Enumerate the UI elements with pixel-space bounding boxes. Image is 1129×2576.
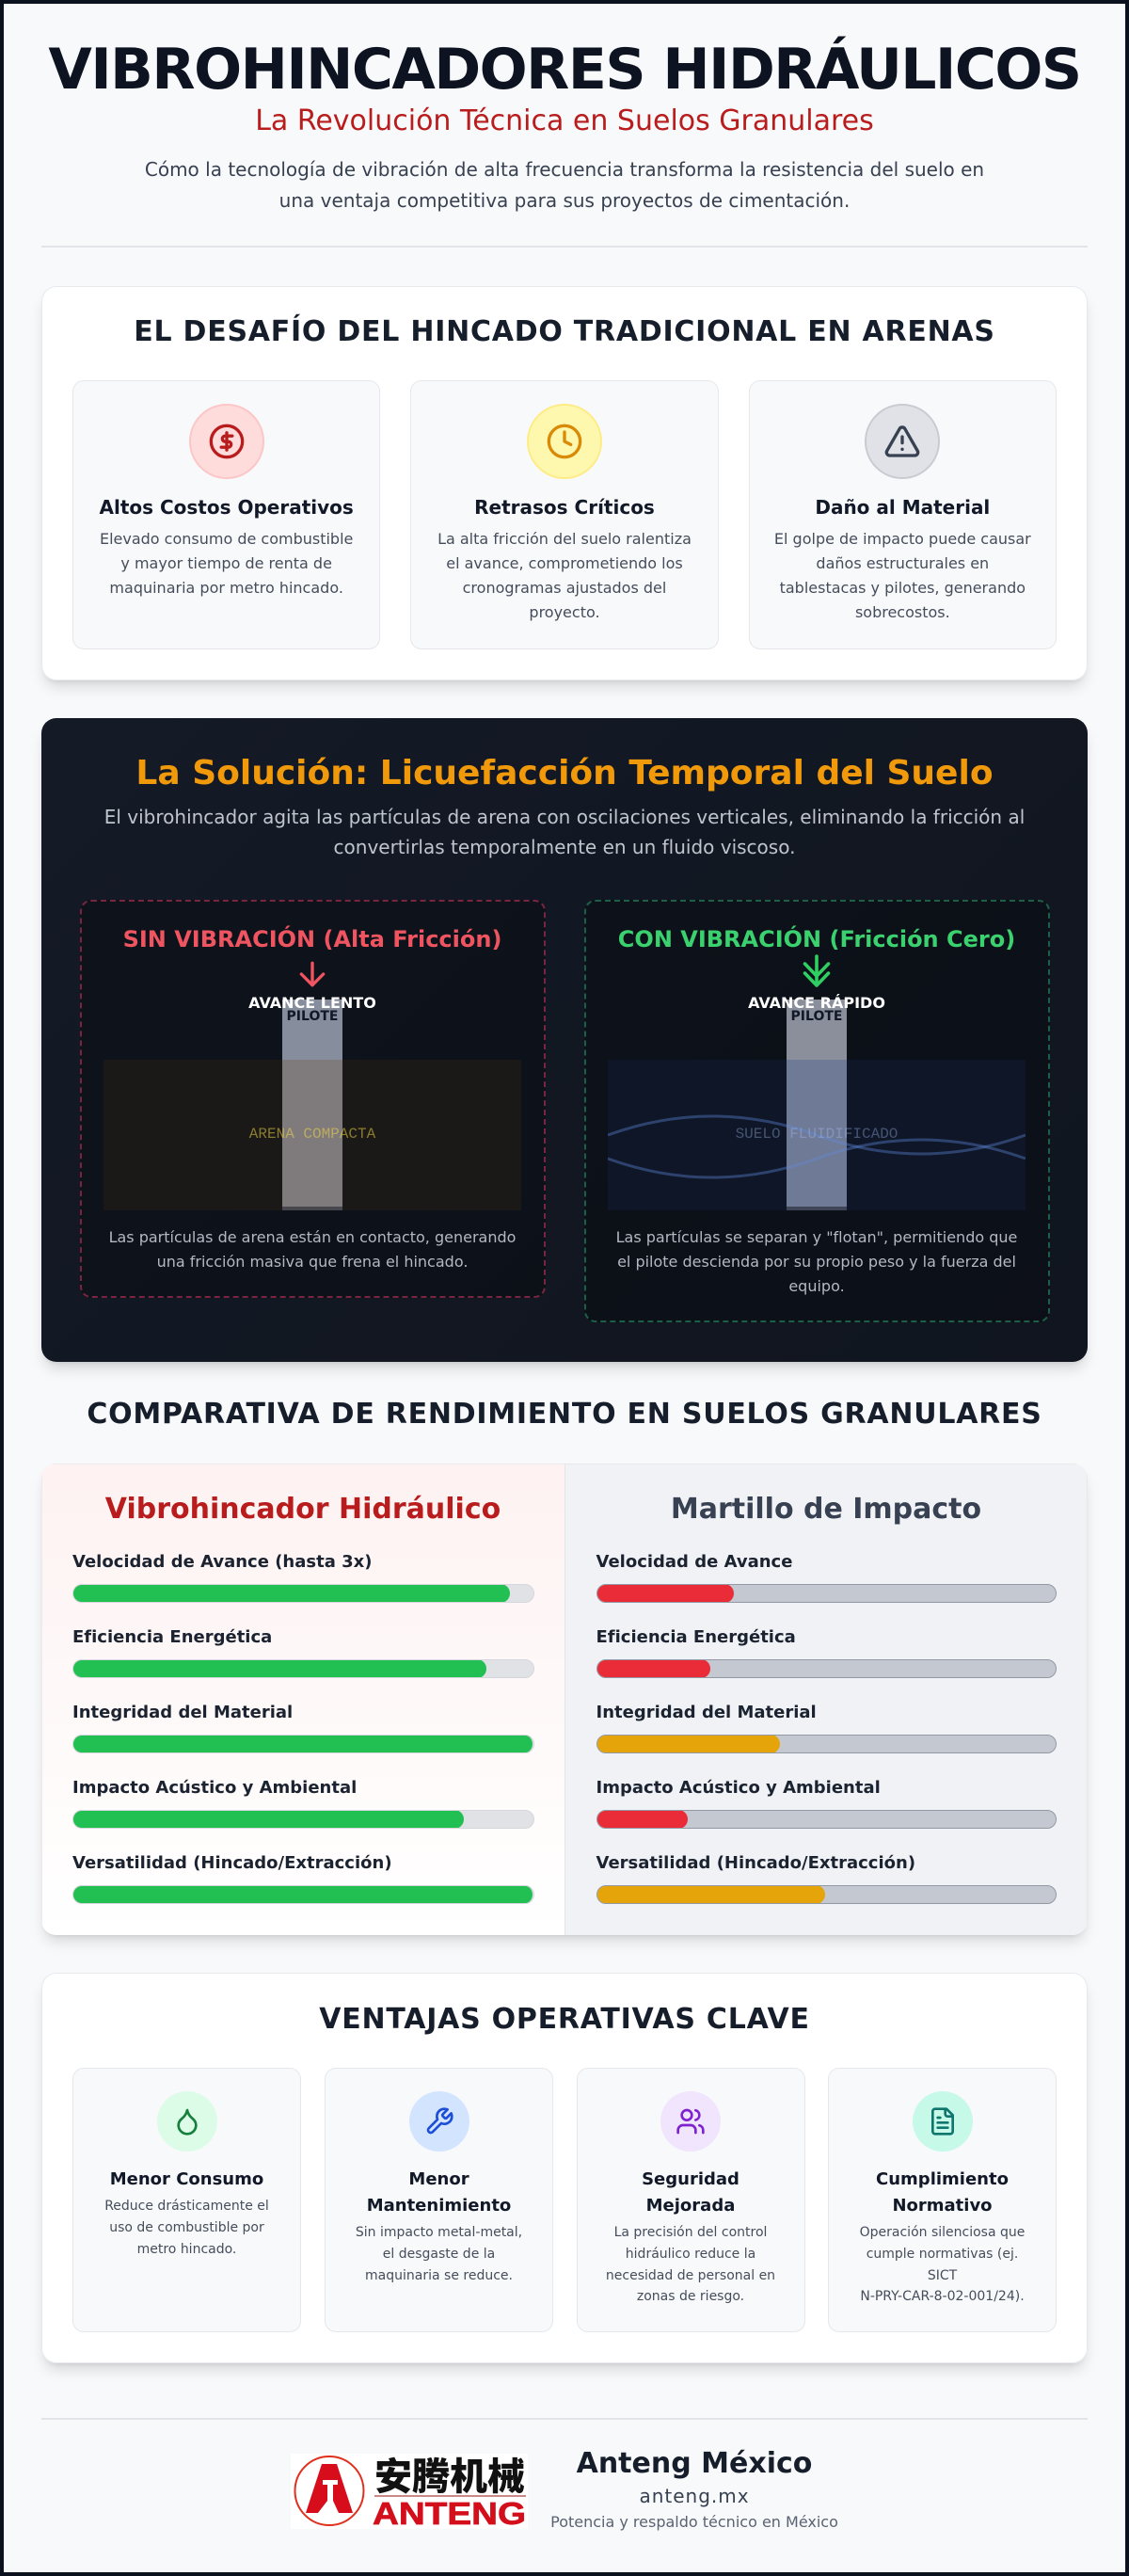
label: suelo fluidificado: SUELO FLUIDIFICADO (736, 1126, 898, 1143)
label: pilote: PILOTE (791, 1009, 842, 1024)
metric label: Eficiencia Energética (596, 1627, 796, 1647)
heading: desafío: EL DESAFÍO DEL HINCADO TRADICIONAL EN ARENAS (134, 315, 995, 348)
card text: Sin impacto metal-metal, (356, 2225, 522, 2240)
card: daño (749, 380, 1057, 649)
website: anteng.mx (639, 2485, 750, 2507)
card: altos costos (72, 380, 380, 649)
card text: sobrecostos. (855, 603, 950, 621)
heading: sin vibración: SIN VIBRACIÓN (Alta Fricción) (123, 926, 501, 952)
card title: Menor (408, 2169, 469, 2189)
column: martillo (564, 1464, 1088, 1935)
card text: cronogramas ajustados del (463, 579, 666, 597)
card title: Seguridad (642, 2169, 739, 2189)
panel: ventajas (41, 1973, 1088, 2363)
label: avance rápido: AVANCE RÁPIDO (748, 994, 885, 1012)
metric label: Impacto Acústico y Ambiental (72, 1778, 357, 1798)
metric bar: 40% (596, 1735, 1057, 1753)
card title: Daño al Material (815, 496, 990, 519)
card text: el desgaste de la (383, 2247, 495, 2262)
card: seguridad (576, 2068, 805, 2332)
metric bar: 20% (596, 1810, 1057, 1829)
column heading: Vibrohincador Hidráulico (105, 1493, 501, 1526)
icon: droplet (156, 2091, 216, 2152)
description: equipo. (788, 1277, 845, 1295)
icon: wrench (408, 2091, 469, 2152)
card text: Operación silenciosa que (860, 2225, 1025, 2240)
pile (282, 1000, 342, 1210)
panel: con vibración (583, 900, 1050, 1322)
card text (356, 2225, 522, 2283)
panel: sin vibración (79, 900, 546, 1298)
solution text (104, 806, 1025, 858)
card title: Altos Costos Operativos (99, 496, 354, 519)
metric bar: 50% (596, 1885, 1057, 1904)
card text: tablestacas y pilotes, generando (780, 579, 1026, 597)
card text: SICT (928, 2268, 957, 2283)
card title: Mejorada (646, 2196, 735, 2216)
card text: cumple normativas (ej. (867, 2247, 1018, 2262)
icon: clock (527, 404, 602, 479)
icon: document (913, 2091, 973, 2152)
column heading: Martillo de Impacto (671, 1493, 981, 1526)
card: cumplimiento (828, 2068, 1057, 2332)
card text (104, 2199, 269, 2257)
metric bar: 90% (72, 1659, 534, 1678)
soil: arena compacta (103, 1060, 521, 1210)
label: pilote: PILOTE (287, 1009, 338, 1024)
card text: La precisión del control (614, 2225, 767, 2240)
intro text (145, 158, 984, 211)
card text: necesidad de personal en (606, 2268, 775, 2283)
card text: N-PRY-CAR-8-02-001/24). (860, 2289, 1025, 2304)
card text: zonas de riesgo. (637, 2289, 744, 2304)
soil: suelo fluidificado (608, 1060, 1026, 1210)
card title (642, 2169, 739, 2216)
card text: maquinaria se reduce. (365, 2268, 513, 2283)
card text: daños estructurales en (816, 554, 989, 572)
description: Las partículas se separan y "flotan", permitiendo que (616, 1228, 1017, 1246)
card text: metro hincado. (137, 2242, 236, 2257)
metric bar: 25% (596, 1659, 1057, 1678)
metric label: Integridad del Material (596, 1703, 817, 1722)
icon: arrow down (299, 962, 326, 986)
panel: el desafío (41, 286, 1088, 680)
card: retrasos (410, 380, 719, 649)
footer: company (550, 2447, 838, 2531)
metric label: Versatilidad (Hincado/Extracción) (72, 1853, 392, 1873)
card title: Mantenimiento (367, 2196, 511, 2216)
description (616, 1228, 1017, 1295)
metric bar: 85% (72, 1810, 534, 1829)
panel: la solución (41, 718, 1088, 1362)
card text: el avance, comprometiendo los (446, 554, 683, 572)
label: avance lento: AVANCE LENTO (248, 994, 376, 1012)
metric label: Integridad del Material (72, 1703, 293, 1722)
card text: Reduce drásticamente el (104, 2199, 269, 2214)
metric bar: 30% (596, 1584, 1057, 1603)
pile (787, 1000, 847, 1210)
card text: uso de combustible por (109, 2220, 264, 2235)
card: menor consumo (72, 2068, 301, 2332)
icon: dollar (189, 404, 264, 479)
label: arena compacta: ARENA COMPACTA (249, 1126, 375, 1143)
metric label: Velocidad de Avance (hasta 3x) (72, 1552, 372, 1572)
card title (367, 2169, 511, 2216)
metric bar: 100% (72, 1885, 534, 1904)
card text: Elevado consumo de combustible (100, 530, 353, 548)
waves (608, 1114, 1026, 1178)
heading: ventajas: VENTAJAS OPERATIVAS CLAVE (319, 2003, 810, 2036)
metric bar: 95% (72, 1584, 534, 1603)
card title (876, 2169, 1009, 2216)
logo: Anteng (294, 2454, 526, 2529)
card: menor mantenimiento (325, 2068, 553, 2332)
card text: y mayor tiempo de renta de (120, 554, 332, 572)
card text (100, 530, 353, 597)
card text (860, 2225, 1025, 2304)
card text: El golpe de impacto puede causar (774, 530, 1031, 548)
icon: warning (865, 404, 940, 479)
metric bar: 100% (72, 1735, 534, 1753)
card text (774, 530, 1031, 621)
intro text: Cómo la tecnología de vibración de alta frecuencia transforma la resistencia del suelo en (145, 158, 984, 181)
card text: proyecto. (529, 603, 600, 621)
card text: hidráulico reduce la (626, 2247, 755, 2262)
solution text: El vibrohincador agita las partículas de arena con oscilaciones verticales, eliminando la fricción al (104, 806, 1025, 828)
tagline: Potencia y respaldo técnico en México (550, 2513, 838, 2531)
metric label: Velocidad de Avance (596, 1552, 792, 1572)
description (109, 1228, 516, 1271)
metric label: Eficiencia Energética (72, 1627, 272, 1647)
company name: Anteng México (577, 2447, 812, 2480)
card text: La alta fricción del suelo ralentiza (437, 530, 692, 548)
heading: solución: La Solución: Licuefacción Temporal del Suelo (135, 754, 994, 792)
card text (606, 2225, 775, 2304)
icon: double arrow down (803, 954, 830, 987)
card text (437, 530, 692, 621)
card text: maquinaria por metro hincado. (109, 579, 343, 597)
panel: comparativa (41, 1464, 1088, 1935)
intro text: una ventaja competitiva para sus proyectos de cimentación. (279, 188, 850, 211)
heading: comparativa: COMPARATIVA DE RENDIMIENTO EN SUELOS GRANULARES (87, 1398, 1042, 1431)
metric label: Impacto Acústico y Ambiental (596, 1778, 881, 1798)
description: el pilote descienda por su propio peso y la fuerza del (617, 1253, 1016, 1271)
column: vibrohincador (41, 1464, 564, 1935)
solution text: convertirlas temporalmente en un fluido viscoso. (334, 836, 795, 858)
title: VIBROHINCADORES HIDRÁULICOS (48, 37, 1081, 103)
metric label: Versatilidad (Hincado/Extracción) (596, 1853, 915, 1873)
card title: Cumplimiento (876, 2169, 1009, 2189)
description: una fricción masiva que frena el hincado. (157, 1253, 468, 1271)
card title: Menor Consumo (110, 2169, 263, 2189)
icon: users (660, 2091, 721, 2152)
card title: Retrasos Críticos (474, 496, 655, 519)
subtitle: La Revolución Técnica en Suelos Granulares (255, 104, 874, 137)
description: Las partículas de arena están en contacto, generando (109, 1228, 516, 1246)
heading: con vibración: CON VIBRACIÓN (Fricción Cero) (618, 926, 1015, 952)
card title: Normativo (892, 2196, 993, 2216)
